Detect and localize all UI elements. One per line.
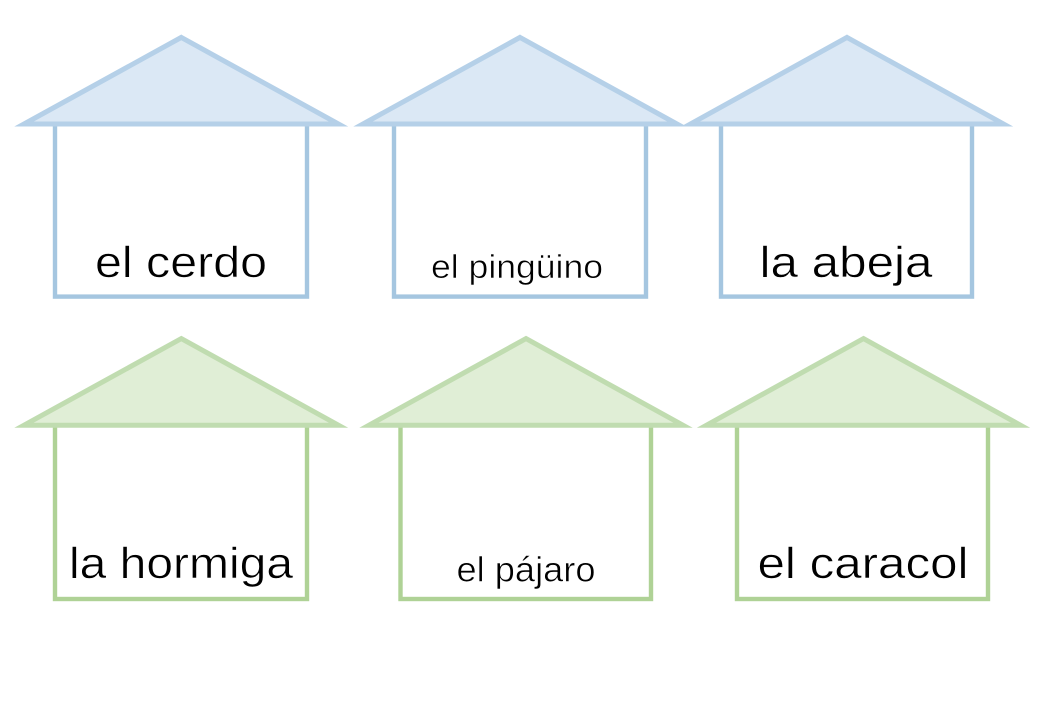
house: el cerdo: el cerdo xyxy=(95,238,267,287)
house: el pájaro xyxy=(369,339,683,599)
house: el pájaro: el pájaro xyxy=(456,550,596,590)
house: la abeja xyxy=(690,37,1004,297)
house: la hormiga xyxy=(24,339,338,599)
house: el cerdo xyxy=(24,37,338,297)
house: la abeja: la abeja xyxy=(760,238,933,287)
house: el pingüino xyxy=(363,37,677,297)
house: el caracol xyxy=(706,339,1020,599)
house: la hormiga: la hormiga xyxy=(69,539,294,588)
house: el caracol: el caracol xyxy=(758,539,968,588)
house: el pingüino: el pingüino xyxy=(431,248,603,285)
